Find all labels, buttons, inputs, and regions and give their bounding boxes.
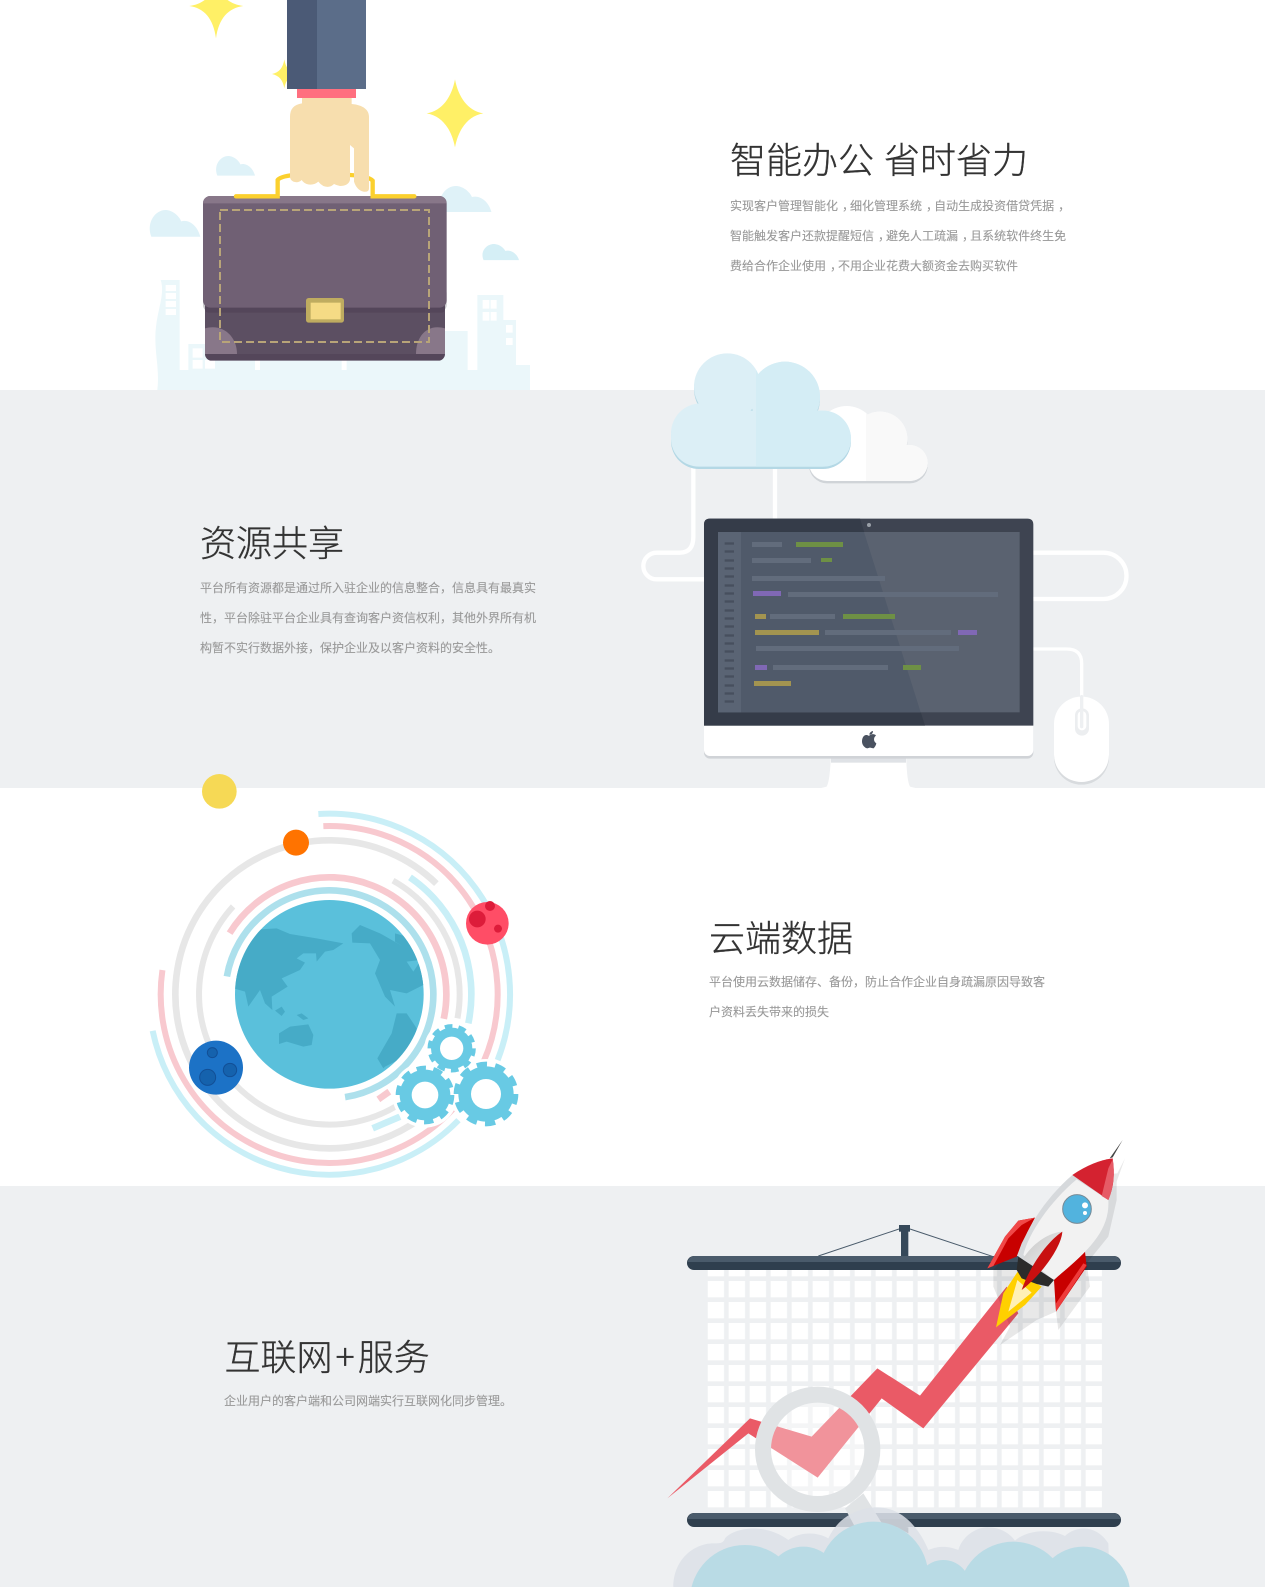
illustration: computer connected to clouds (643, 353, 1126, 790)
heading: resource sharing: 资源共享 (200, 523, 344, 564)
chart board grid (708, 1270, 1102, 1508)
gears (392, 1021, 521, 1129)
panel: cloud data (153, 774, 1045, 1175)
illustration: growth chart with rocket (667, 1140, 1130, 1587)
monitor (704, 519, 1033, 790)
hanger (818, 1225, 993, 1257)
cables (643, 463, 1126, 717)
small white cloud (809, 406, 928, 483)
panel: internet plus service (224, 1140, 1130, 1587)
text: smart office description: 费给合作企业使用 ，不用企业花费大额资金去购买软件 (730, 258, 1018, 273)
text: cloud data description: 平台使用云数据储存、备份，防止合作企业自身疏漏原因导致客 (709, 974, 1045, 989)
text: smart office description: 智能触发客户还款提醒短信 ，避免人工疏漏 ，且系统软件终生免 (730, 228, 1066, 243)
briefcase handle (236, 175, 414, 196)
code editor bars (725, 542, 734, 703)
sleeve (287, 0, 366, 89)
heading: cloud data: 云端数据 (709, 918, 853, 959)
text: resource sharing description: 构暂不实行数据外接，保护企业及以客户资料的安全性。 (200, 640, 500, 655)
text: resource sharing description (200, 580, 536, 655)
heading: internet plus service: 互联网+服务 (224, 1329, 430, 1381)
shirt cuff (297, 89, 356, 98)
text: resource sharing description: 平台所有资源都是通过所入驻企业的信息整合，信息具有最真实 (200, 580, 536, 595)
blue planet (189, 1041, 243, 1095)
large blue cloud (671, 353, 851, 469)
city skyline (155, 280, 530, 390)
clouds (150, 156, 519, 260)
illustration: hand holding briefcase (150, 0, 530, 390)
briefcase (203, 196, 447, 361)
yellow planet (202, 774, 237, 809)
text: cloud data description: 户资料丢失带来的损失 (709, 1004, 829, 1019)
panel: smart office (150, 0, 1070, 390)
clouds (673, 1507, 1130, 1587)
stars (189, 0, 483, 147)
red planet (466, 901, 509, 945)
text: internet plus service description: 企业用户的客户端和公司网端实行互联网化同步管理。 (224, 1393, 512, 1408)
bottom rail (687, 1513, 1121, 1527)
rising red arrow line (667, 1287, 1018, 1498)
panel: resource sharing (200, 353, 1126, 790)
illustration: earth with orbits and gears (153, 774, 521, 1175)
orange planet (283, 830, 309, 856)
top rail (687, 1256, 1121, 1270)
text: smart office description (730, 198, 1070, 273)
earth (233, 900, 427, 1089)
icon: apple logo (862, 731, 876, 748)
hand (290, 97, 369, 192)
orbit rings (153, 814, 510, 1175)
text: smart office description: 实现客户管理智能化 ，细化管理系统 ，自动生成投资借贷凭据 ， (730, 198, 1070, 213)
heading: smart office: 智能办公 省时省力 (730, 140, 1028, 181)
magnifier (763, 1395, 908, 1533)
rocket (987, 1140, 1125, 1345)
mouse (1054, 697, 1109, 785)
text: resource sharing description: 性，平台除驻平台企业具有查询客户资信权利，其他外界所有机 (200, 610, 536, 625)
text: cloud data description (709, 974, 1045, 1019)
